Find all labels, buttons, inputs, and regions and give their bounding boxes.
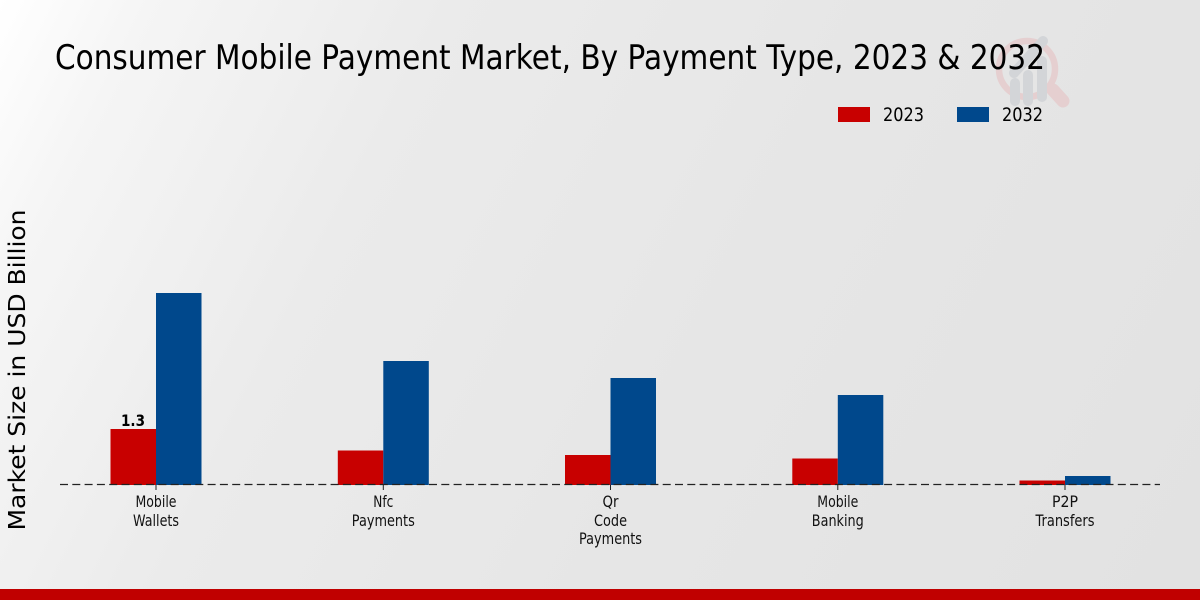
value label: 1.3: 1.3 [121,411,145,430]
legend item: 2023 [838,104,924,126]
bars: Nfc Payments [338,361,429,485]
label: Qr Code Payments: Payments [579,529,642,548]
label: Qr Code Payments: Code [594,511,627,530]
legend item: 2032: 2032 [1002,104,1043,126]
label: Nfc Payments [352,492,415,530]
title: Consumer Mobile Payment Market, By Payment Type, 2023 & 2032 [55,38,1045,78]
icon: watermark magnifier logo [999,41,1063,106]
bars: Mobile Wallets [110,293,202,485]
label: Qr Code Payments [579,492,642,548]
y-axis label: Market Size in USD Billion [5,210,31,530]
label: Mobile Banking: Mobile [817,492,858,511]
bars: Mobile Banking [792,395,883,485]
label: Mobile Banking: Banking [812,511,864,530]
bottom red bar [0,589,1200,600]
label: P2P Transfers: Transfers [1035,511,1094,530]
label: Mobile Wallets: Wallets [133,511,179,530]
bars: Qr Code Payments [565,378,656,485]
bar chart [60,293,1160,490]
label: Mobile Wallets [133,492,179,530]
label: Qr Code Payments: Qr [602,492,619,511]
legend item: 2032 [957,104,1043,126]
x-axis category labels [133,492,1094,548]
label: Nfc Payments: Nfc [373,492,393,511]
label: P2P Transfers: P2P [1052,492,1078,511]
label: Nfc Payments: Payments [352,511,415,530]
label: Mobile Banking [812,492,864,530]
legend item: 2023: 2023 [883,104,924,126]
label: P2P Transfers [1035,492,1094,530]
bars: P2P Transfers [1020,476,1110,485]
legend [838,104,1043,126]
label: Mobile Wallets: Mobile [136,492,176,511]
